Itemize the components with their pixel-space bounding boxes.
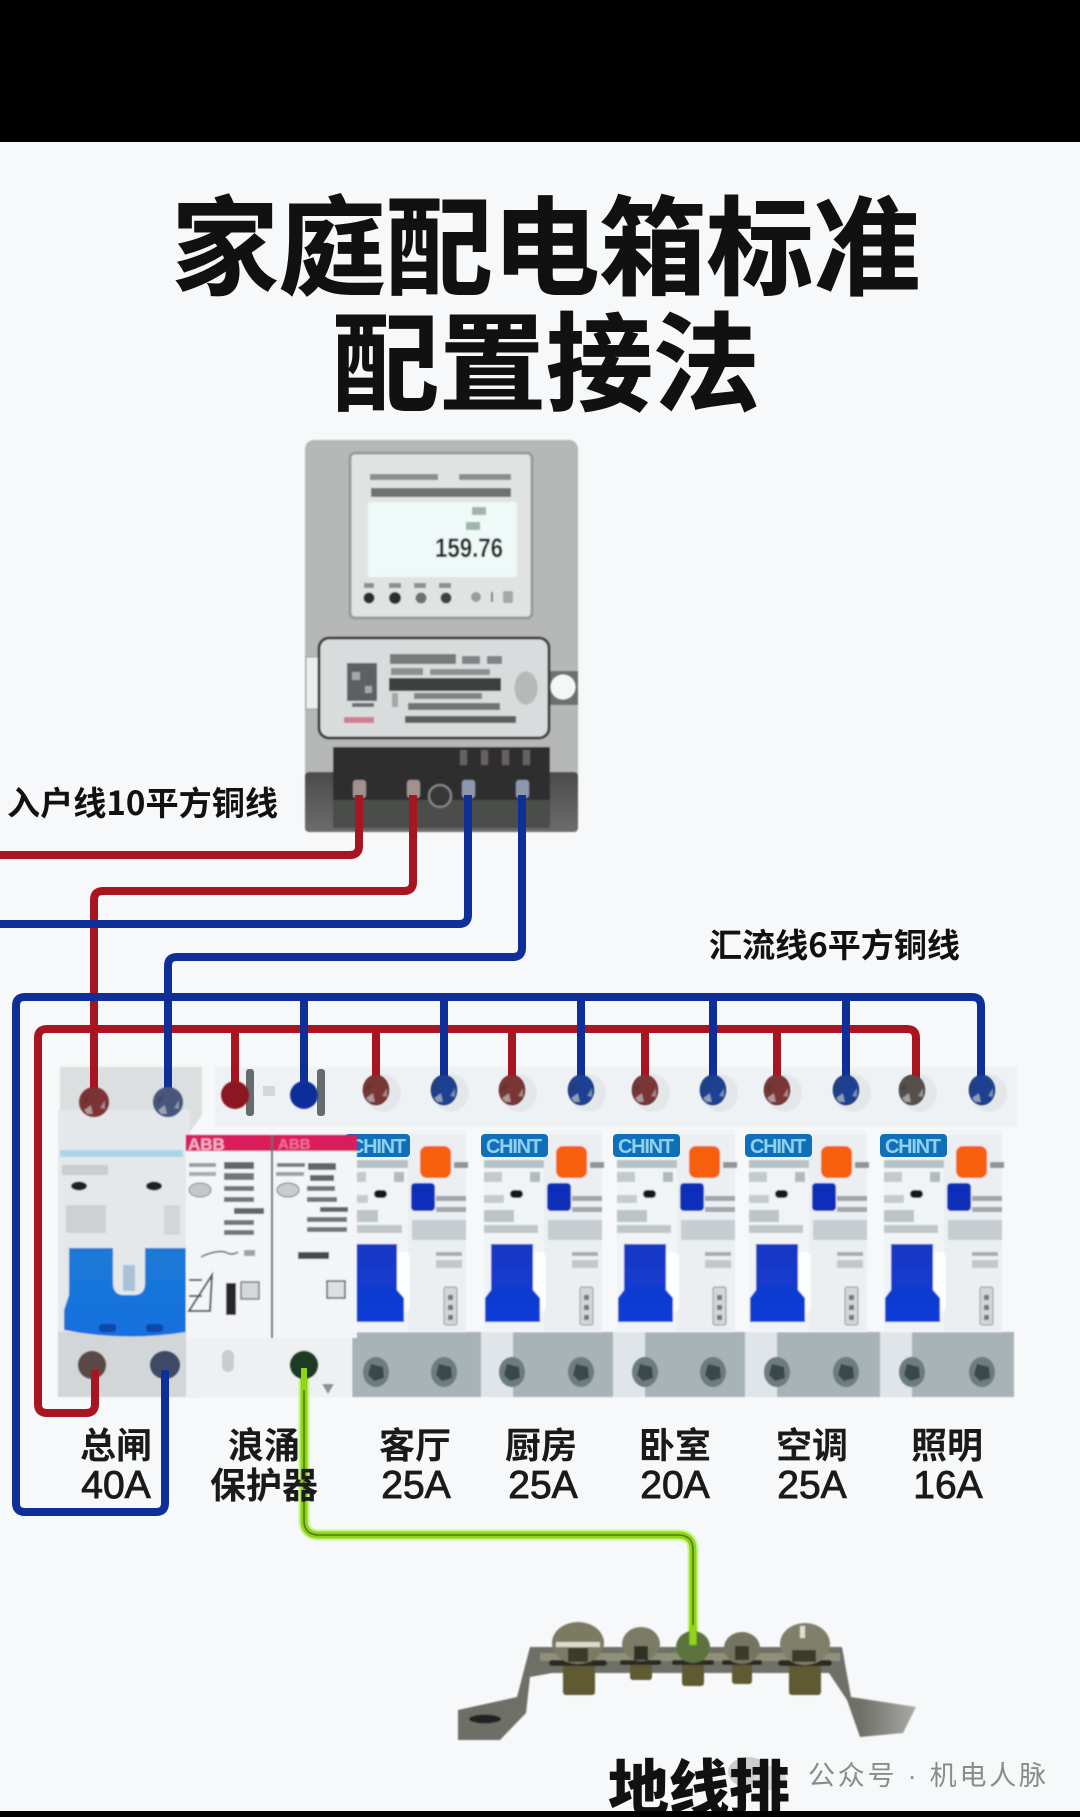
breaker module: lighting: CHINT <box>885 1136 941 1158</box>
label: kitchen: 厨房 <box>505 1417 577 1469</box>
electric meter <box>305 440 578 832</box>
surge protector body <box>186 1135 357 1397</box>
label: bedroom: 20A <box>640 1464 710 1507</box>
screw 4 <box>722 1632 762 1684</box>
main breaker body <box>58 1067 202 1397</box>
top terminal strip <box>215 1067 1017 1127</box>
meter terminal block <box>305 747 578 832</box>
meter display panel <box>350 453 532 618</box>
label: living room: 25A <box>381 1464 451 1507</box>
label: main switch: 40A <box>81 1464 151 1507</box>
label: lighting <box>911 1417 983 1507</box>
label: air conditioner <box>776 1417 848 1507</box>
label: surge protector: 浪涌 <box>228 1417 300 1469</box>
terminal lug highlights <box>83 1084 993 1114</box>
label: bedroom: 卧室 <box>639 1417 711 1469</box>
title: 配置接法 <box>332 278 760 433</box>
lower wire overlay <box>95 1368 304 1404</box>
label: kitchen <box>505 1417 578 1507</box>
top black bar <box>0 0 1080 142</box>
surge protector body: ABB <box>188 1135 225 1154</box>
wires: blue neutral <box>0 795 981 1512</box>
screw 5 <box>778 1623 832 1695</box>
label: air conditioner: 空调 <box>776 1417 848 1469</box>
breaker module: air conditioner: CHINT <box>750 1136 806 1158</box>
bottom black bar <box>0 1811 1080 1817</box>
screw 2 <box>620 1627 661 1680</box>
label: living room <box>379 1417 451 1507</box>
watermark icon <box>728 1757 786 1790</box>
breaker module: kitchen <box>481 1130 604 1332</box>
watermark text: 公众号 · 机电人脉 <box>808 1761 1046 1791</box>
label: surge protector <box>210 1417 318 1509</box>
label: living room: 客厅 <box>379 1417 451 1469</box>
screw 3 <box>672 1625 714 1686</box>
label: main switch: 总闸 <box>80 1417 152 1469</box>
label: bedroom <box>639 1417 711 1507</box>
label: air conditioner: 25A <box>777 1464 847 1507</box>
green earth wire <box>304 1365 693 1646</box>
title: 家庭配电箱标准 <box>171 162 921 317</box>
breaker module: bedroom: CHINT <box>618 1136 674 1158</box>
label: busbar line: 汇流线6平方铜线 <box>709 919 960 967</box>
top screws shadow <box>363 1074 1007 1112</box>
wire terminal lugs <box>78 1075 995 1379</box>
label: lighting: 16A <box>913 1464 983 1507</box>
bottom screws <box>363 1357 995 1387</box>
earth bar <box>458 1622 916 1740</box>
breaker module: lighting <box>880 1130 1004 1332</box>
breaker module: living room <box>345 1130 468 1332</box>
label: kitchen: 25A <box>508 1464 578 1507</box>
label: main switch <box>80 1417 152 1507</box>
screw 1 <box>549 1622 607 1695</box>
surge protector body: ABB <box>278 1136 311 1153</box>
meter reading: 159.76 <box>435 533 503 563</box>
breaker rail <box>58 1067 1017 1397</box>
label: lighting: 照明 <box>911 1417 983 1469</box>
device labels <box>80 1417 983 1509</box>
title <box>171 162 921 433</box>
meter nameplate <box>319 638 549 738</box>
meter seal tab right <box>548 671 578 705</box>
side tab left <box>306 657 319 709</box>
meter body <box>305 440 578 832</box>
breaker module: living room: CHINT <box>350 1136 406 1158</box>
label: incoming line: 入户线10平方铜线 <box>7 777 278 825</box>
surge module clamps <box>246 1069 325 1116</box>
bracket <box>458 1647 916 1740</box>
label: surge protector: 保护器 <box>210 1457 318 1509</box>
breaker module: air conditioner <box>745 1130 869 1332</box>
main breaker handle <box>64 1248 186 1337</box>
bottom terminal band <box>352 1332 1014 1397</box>
breaker module: kitchen: CHINT <box>486 1136 542 1158</box>
breaker module: bedroom <box>613 1130 737 1332</box>
wires: red phase <box>0 795 916 1413</box>
